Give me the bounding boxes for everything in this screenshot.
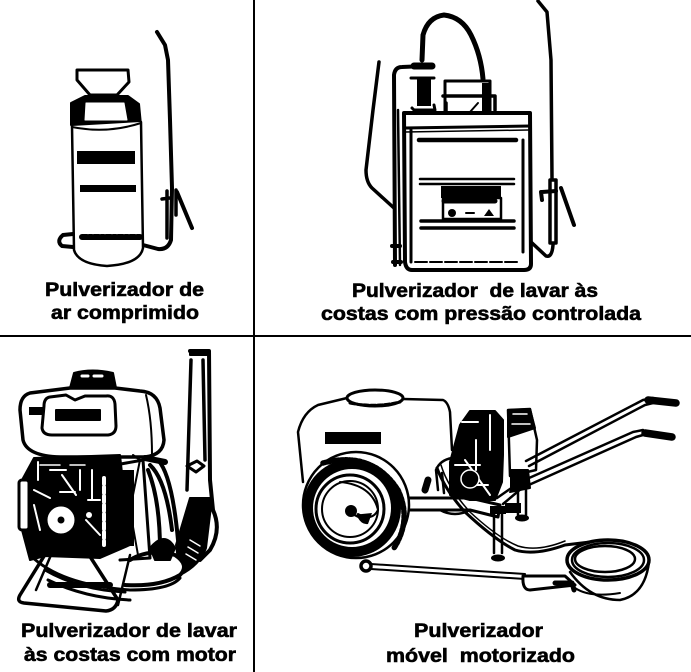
caption: controlled pressure knapsack sprayer xyxy=(321,280,641,325)
panel: motorised knapsack sprayer xyxy=(19,351,237,666)
panel: compressed air sprayer xyxy=(45,32,204,324)
caption: compressed air sprayer: Pulverizador de xyxy=(45,279,204,301)
icon: motorised mobile sprayer xyxy=(298,390,676,600)
caption: motorised mobile sprayer: móvel motorizado xyxy=(386,645,575,667)
caption: motorised knapsack sprayer xyxy=(21,620,237,666)
caption: motorised mobile sprayer xyxy=(386,620,575,667)
icon: compressed air sprayer xyxy=(59,32,192,266)
caption: motorised knapsack sprayer: Pulverizador de lavar xyxy=(21,620,237,642)
caption: controlled pressure knapsack sprayer: Pulverizador de lavar às xyxy=(352,280,598,302)
panel: controlled pressure knapsack sprayer xyxy=(321,1,641,325)
caption: compressed air sprayer xyxy=(45,279,204,324)
icon: knapsack sprayer xyxy=(366,1,574,270)
caption: motorised knapsack sprayer: às costas com motor xyxy=(24,644,236,666)
caption: controlled pressure knapsack sprayer: costas com pressão controlada xyxy=(321,303,641,325)
caption: motorised mobile sprayer: Pulverizador xyxy=(414,620,543,642)
caption: compressed air sprayer: ar comprimido xyxy=(51,302,199,324)
icon: motorised knapsack sprayer xyxy=(19,351,217,611)
panel: motorised mobile sprayer xyxy=(298,390,676,667)
